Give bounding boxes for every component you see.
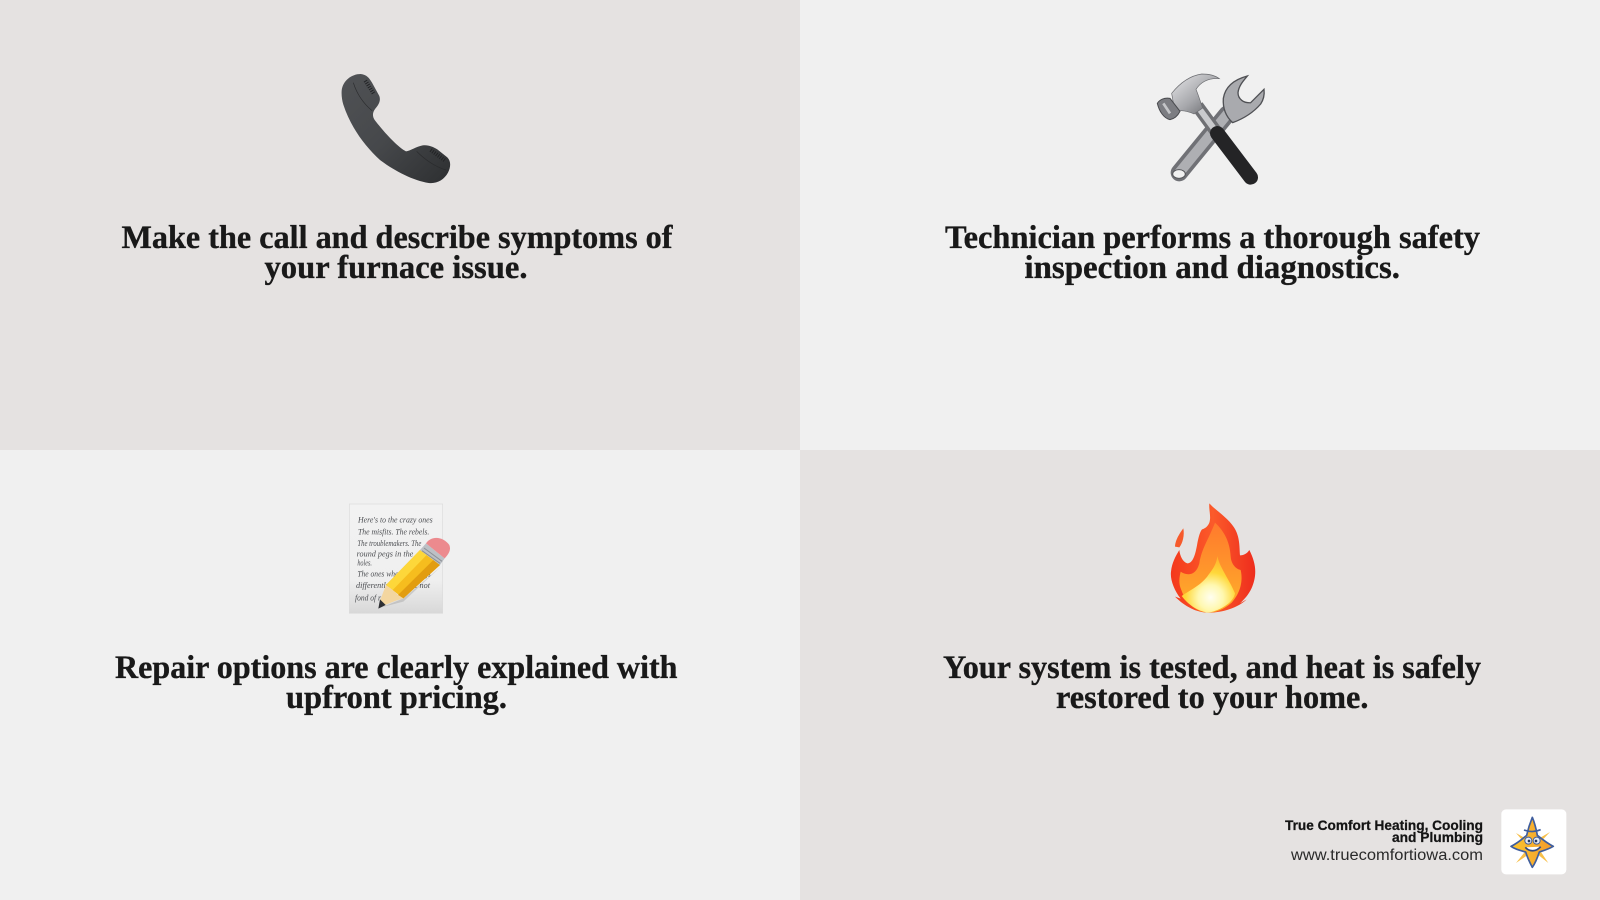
panel: technician inspection [800, 0, 1600, 450]
step 3 text [115, 650, 678, 716]
step 1 text: Make the call and describe symptoms of [122, 220, 673, 256]
panel: repair options [0, 450, 800, 900]
step 2 text [945, 220, 1480, 286]
logo badge [1501, 809, 1566, 874]
icon: memo and pencil: holes. [357, 558, 372, 567]
icon: telephone receiver [342, 74, 450, 183]
step 2 text: inspection and diagnostics. [1024, 250, 1400, 286]
company name and website [1285, 817, 1483, 864]
step 4 text: Your system is tested, and heat is safely [943, 650, 1481, 686]
icon: memo and pencil [349, 504, 450, 613]
step 4 text: restored to your home. [1056, 680, 1368, 716]
icon: memo and pencil: Here's to the crazy ones [357, 516, 433, 525]
step 1 text: your furnace issue. [264, 250, 528, 286]
icon: memo and pencil: The misfits. The rebels. [358, 527, 429, 536]
icon: memo and pencil: round pegs in the [357, 550, 414, 559]
icon: memo and pencil: The troublemakers. The [357, 539, 422, 548]
step 3 text: Repair options are clearly explained with [115, 650, 678, 686]
step 2 text: Technician performs a thorough safety [945, 220, 1480, 256]
step 4 text [943, 650, 1481, 716]
icon: memo and pencil: differently. They're not [356, 581, 431, 590]
icon: memo and pencil: The ones who see things [357, 570, 431, 579]
panel: make the call [0, 0, 800, 450]
icon: hammer and wrench [1157, 74, 1264, 178]
step 3 text: upfront pricing. [286, 680, 507, 716]
company name and website: True Comfort Heating, Cooling [1285, 817, 1483, 833]
step 1 text [122, 220, 673, 286]
icon: memo and pencil: fond of rules. [355, 594, 395, 603]
panel: heat restored [800, 450, 1600, 900]
company name and website: www.truecomfortiowa.com [1290, 847, 1483, 864]
company name and website: and Plumbing [1392, 829, 1483, 845]
icon: fire [1171, 503, 1255, 613]
